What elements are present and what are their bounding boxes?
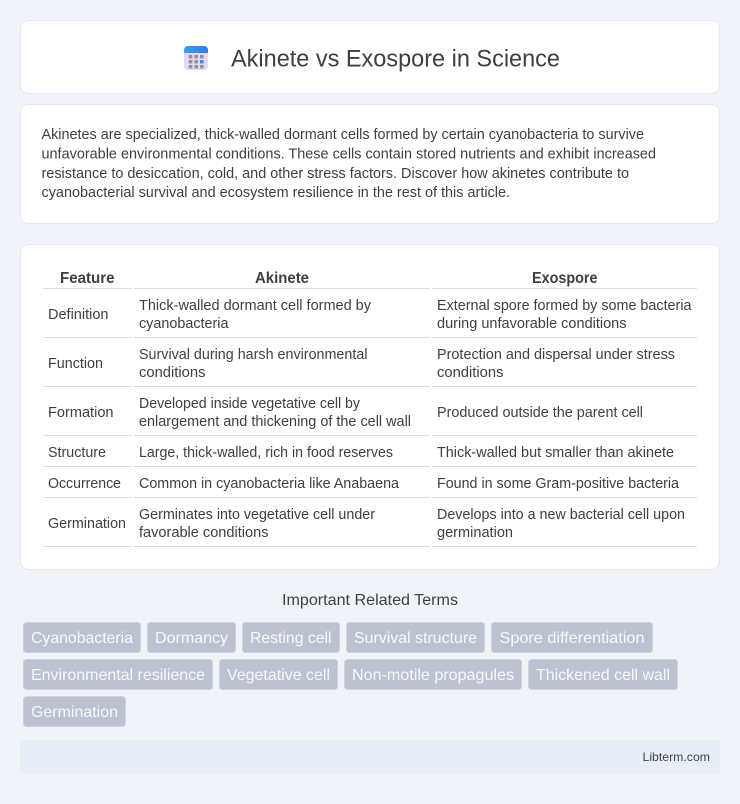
heading: important related terms: Important Related Terms bbox=[282, 592, 458, 609]
footer source text: Libterm.com bbox=[642, 750, 710, 764]
tag: spore differentiation bbox=[492, 622, 652, 652]
table row: definition: Definition bbox=[48, 307, 109, 323]
table row: function: Protection and dispersal under stress bbox=[437, 347, 675, 363]
table row: definition bbox=[43, 298, 697, 338]
tag: vegetative cell bbox=[220, 660, 338, 690]
table row: structure: Large, thick-walled, rich in food reserves bbox=[139, 445, 393, 461]
table row: occurrence: Occurrence bbox=[48, 476, 121, 492]
tag: dormancy bbox=[148, 622, 236, 652]
table row: definition: External spore formed by some bacteria bbox=[437, 298, 692, 314]
tag: germination bbox=[24, 696, 126, 726]
tag: resting cell bbox=[242, 622, 340, 652]
tag: survival structure: Survival structure bbox=[354, 630, 477, 647]
table header row bbox=[43, 270, 697, 289]
tag: environmental resilience: Environmental resilience bbox=[31, 667, 205, 684]
tag list: related terms bbox=[24, 622, 678, 726]
text block: introduction bbox=[42, 127, 656, 201]
table row: definition: cyanobacteria bbox=[139, 316, 229, 332]
panel: header bbox=[20, 20, 720, 94]
table row: definition: during unfavorable conditions bbox=[437, 316, 626, 332]
table row: formation: Developed inside vegetative cell by bbox=[139, 396, 361, 412]
table row: germination: Germination bbox=[48, 516, 126, 532]
table row: function: conditions bbox=[437, 365, 504, 381]
text block: introduction: Akinetes are specialized, thick-walled dormant cells formed by certain cyanobacteria to survive bbox=[42, 127, 644, 143]
table row: germination: Germinates into vegetative cell under bbox=[139, 507, 375, 523]
tag: spore differentiation: Spore differentiation bbox=[500, 630, 644, 647]
table row: function: Survival during harsh environmental bbox=[139, 347, 368, 363]
table row: germination bbox=[43, 507, 697, 547]
tag: non-motile propagules bbox=[344, 660, 522, 690]
table row: function bbox=[43, 347, 697, 387]
title: Akinete vs Exospore in Science bbox=[231, 46, 560, 72]
text block: introduction: resistance to desiccation, cold, and other stress factors. Discover how akinetes contribute to bbox=[42, 166, 629, 182]
table row: structure bbox=[43, 445, 697, 467]
tag: thickened cell wall: Thickened cell wall bbox=[536, 667, 670, 684]
tag: survival structure bbox=[346, 622, 484, 652]
table row: formation bbox=[43, 396, 697, 436]
tag: non-motile propagules: Non-motile propagules bbox=[352, 667, 514, 684]
table row: structure: Thick-walled but smaller than akinete bbox=[437, 445, 674, 461]
table row: germination: germination bbox=[437, 525, 513, 541]
tag: resting cell: Resting cell bbox=[250, 630, 332, 647]
tag: thickened cell wall bbox=[528, 660, 678, 690]
table row: definition: Thick-walled dormant cell formed by bbox=[139, 298, 372, 314]
text block: introduction: cyanobacterial survival and ecosystem resilience in the rest of this article. bbox=[42, 185, 510, 201]
table row: occurrence: Found in some Gram-positive bacteria bbox=[437, 476, 679, 492]
footer bbox=[20, 740, 720, 774]
table row: occurrence bbox=[43, 476, 697, 498]
table row: function: Function bbox=[48, 356, 103, 372]
panel: introduction bbox=[20, 104, 720, 224]
tag: germination: Germination bbox=[31, 704, 118, 721]
tag: dormancy: Dormancy bbox=[155, 630, 228, 647]
table row: occurrence: Common in cyanobacteria like Anabaena bbox=[139, 476, 399, 492]
tag: vegetative cell: Vegetative cell bbox=[227, 667, 330, 684]
icon: calendar bbox=[184, 46, 208, 70]
table row: function: conditions bbox=[139, 365, 206, 381]
table header row: Feature bbox=[60, 270, 114, 287]
tag: cyanobacteria bbox=[24, 622, 140, 652]
text block: introduction: unfavorable environmental conditions. These cells contain stored nutrients and exhibit increased bbox=[42, 146, 656, 162]
table row: formation: Formation bbox=[48, 405, 114, 421]
table header row: Exospore bbox=[532, 270, 598, 287]
table header row: Akinete bbox=[255, 270, 309, 287]
table row: formation: enlargement and thickening of the cell wall bbox=[139, 414, 411, 430]
tag: cyanobacteria: Cyanobacteria bbox=[31, 630, 133, 647]
table row: formation: Produced outside the parent cell bbox=[437, 405, 643, 421]
tag: environmental resilience bbox=[24, 660, 212, 690]
panel: comparison table bbox=[20, 244, 720, 570]
table row: structure: Structure bbox=[48, 445, 106, 461]
table row: germination: favorable conditions bbox=[139, 525, 268, 541]
table row: germination: Develops into a new bacterial cell upon bbox=[437, 507, 685, 523]
